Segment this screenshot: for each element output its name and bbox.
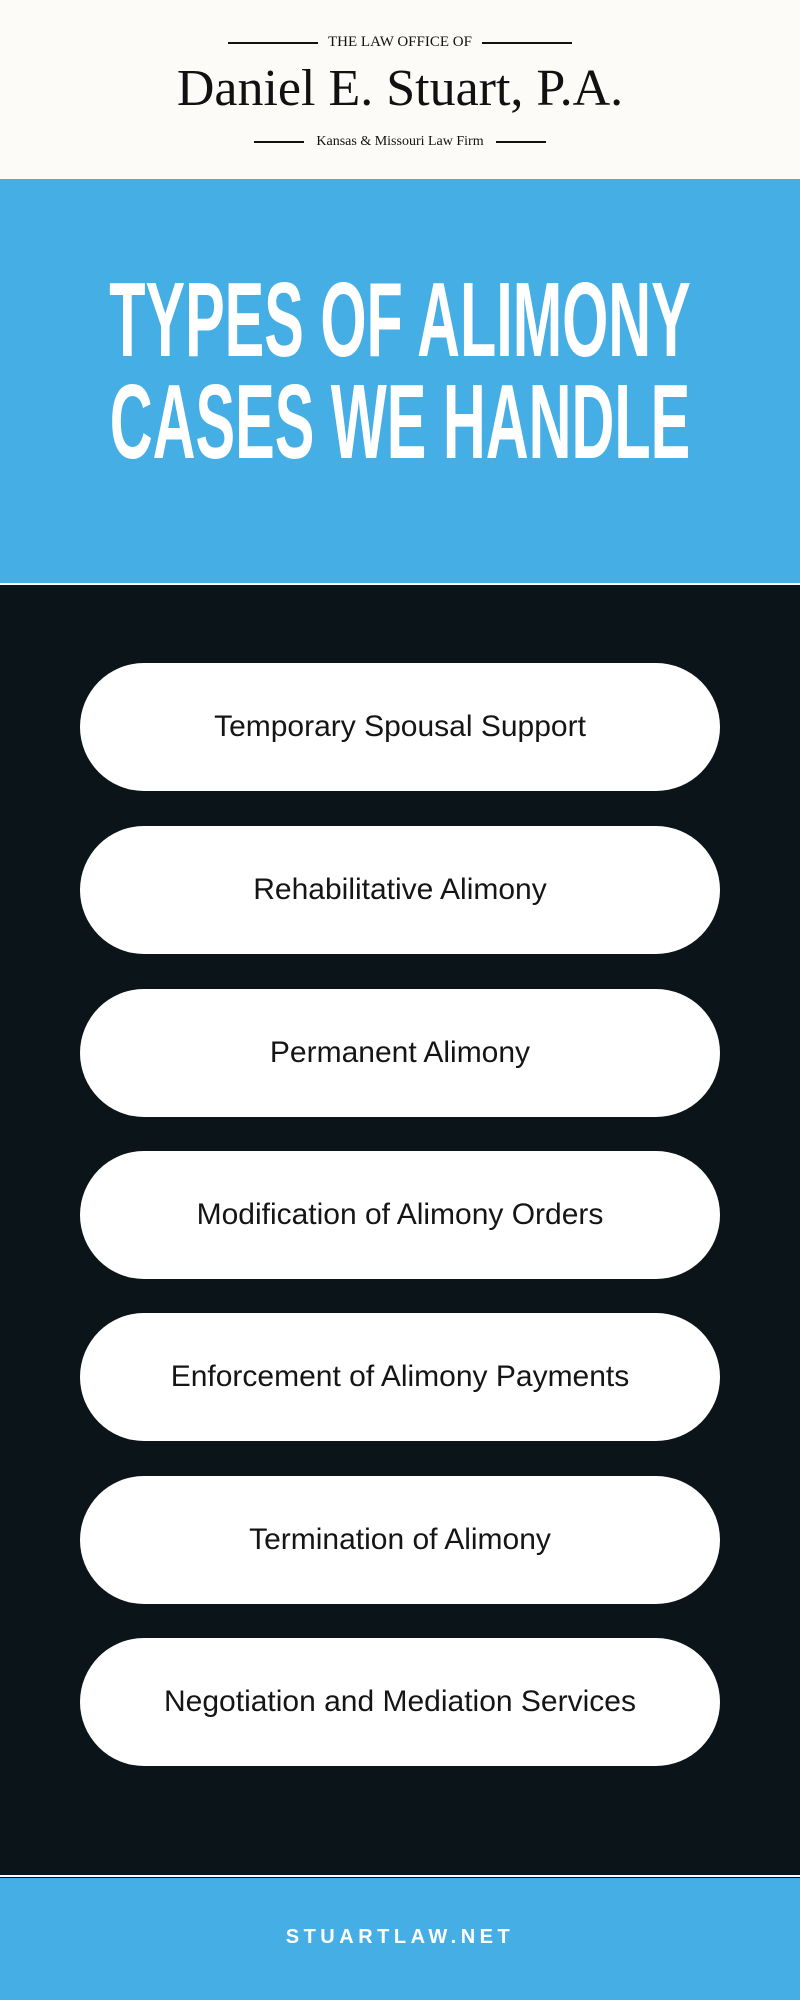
title panel <box>0 179 800 583</box>
pill: rehabilitative: Rehabilitative Alimony <box>253 873 547 906</box>
list of alimony case types <box>80 663 720 1766</box>
pill: modification <box>80 1151 720 1279</box>
header <box>0 0 800 179</box>
pill: permanent: Permanent Alimony <box>270 1036 530 1069</box>
pill: negotiation: Negotiation and Mediation Services <box>164 1685 636 1718</box>
pill: enforcement <box>80 1313 720 1441</box>
pill: termination: Termination of Alimony <box>249 1523 551 1556</box>
pill: permanent <box>80 989 720 1117</box>
pill: modification: Modification of Alimony Orders <box>197 1198 603 1231</box>
title: CASES WE HANDLE <box>110 363 690 481</box>
pill: enforcement: Enforcement of Alimony Payments <box>171 1360 629 1393</box>
title: TYPES OF ALIMONY <box>109 261 691 379</box>
footer: website: STUARTLAW.NET <box>286 1926 514 1948</box>
pill: temporary: Temporary Spousal Support <box>214 710 586 743</box>
pill: temporary <box>80 663 720 791</box>
pill: rehabilitative <box>80 826 720 954</box>
pill: termination <box>80 1476 720 1604</box>
footer <box>0 1878 800 2000</box>
title <box>109 261 691 481</box>
pill: negotiation <box>80 1638 720 1766</box>
header: tagline: Kansas & Missouri Law Firm <box>316 134 484 149</box>
header: firm name: Daniel E. Stuart, P.A. <box>177 60 623 117</box>
header: eyebrow: THE LAW OFFICE OF <box>328 34 472 50</box>
